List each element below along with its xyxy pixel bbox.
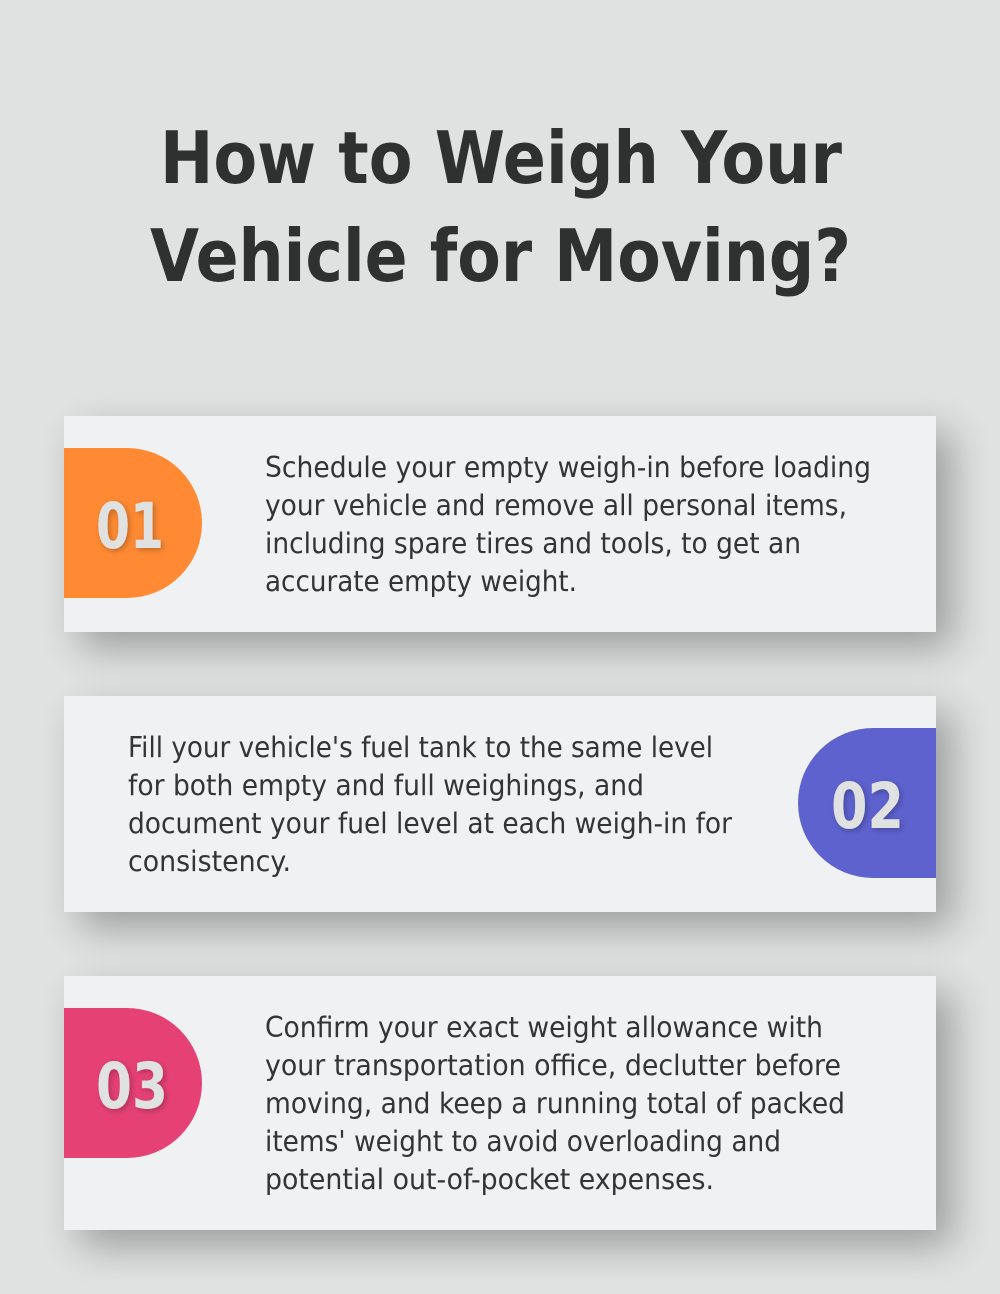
text: step 3: your transportation office, declutter before bbox=[265, 1049, 841, 1082]
text: step 3 bbox=[265, 1011, 845, 1196]
title: How to Weigh Your bbox=[160, 116, 842, 200]
text: step 1: accurate empty weight. bbox=[265, 565, 577, 598]
badge: 03 bbox=[64, 1008, 202, 1158]
text: step 3: Confirm your exact weight allowance with bbox=[265, 1011, 823, 1044]
badge: 02 bbox=[798, 728, 936, 878]
text: step 1: Schedule your empty weigh-in before loading bbox=[265, 451, 871, 484]
text: step 1: your vehicle and remove all personal items, bbox=[265, 489, 847, 522]
panel: step 3 bbox=[64, 976, 952, 1246]
badge: 03: 03 bbox=[96, 1050, 168, 1123]
text: step 2: Fill your vehicle's fuel tank to the same level bbox=[128, 731, 713, 764]
panel: step 1 bbox=[64, 416, 952, 648]
text: step 1 bbox=[265, 451, 871, 598]
text: step 2: consistency. bbox=[128, 845, 291, 878]
badge: 02: 02 bbox=[831, 770, 904, 843]
title bbox=[150, 116, 851, 298]
panel: step 2 bbox=[64, 696, 952, 928]
text: step 3: potential out-of-pocket expenses. bbox=[265, 1163, 714, 1196]
text: step 2: document your fuel level at each weigh-in for bbox=[128, 807, 732, 840]
text: step 3: items' weight to avoid overloading and bbox=[265, 1125, 781, 1158]
badge: 01: 01 bbox=[96, 490, 164, 563]
text: step 1: including spare tires and tools, to get an bbox=[265, 527, 801, 560]
text: step 3: moving, and keep a running total of packed bbox=[265, 1087, 845, 1120]
text: step 2 bbox=[128, 731, 732, 878]
text: step 2: for both empty and full weighings, and bbox=[128, 769, 644, 802]
badge: 01 bbox=[64, 448, 202, 598]
title: Vehicle for Moving? bbox=[150, 214, 851, 298]
